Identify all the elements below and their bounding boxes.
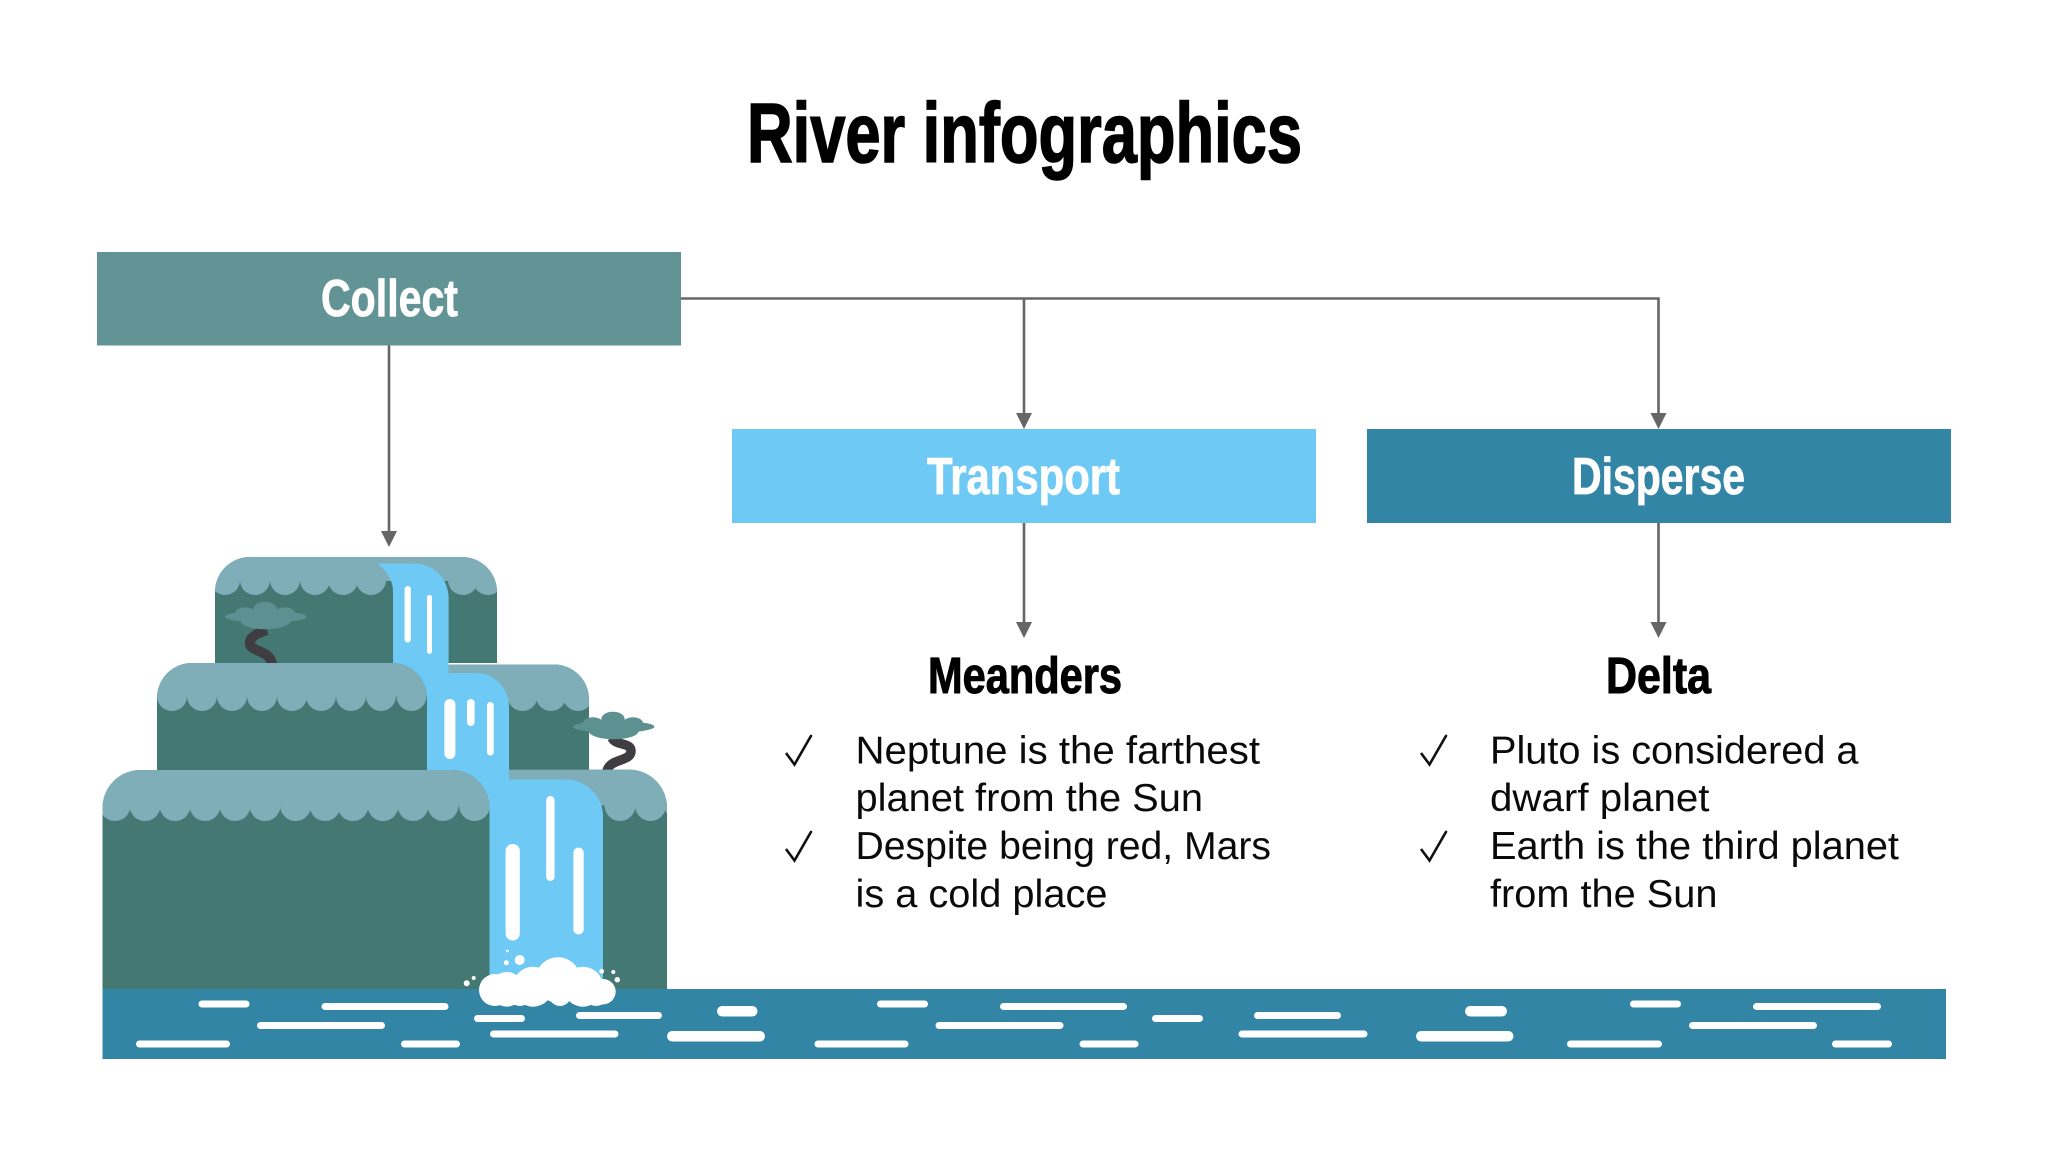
river ripples <box>136 1000 1892 1048</box>
heading: Delta: Delta <box>1606 647 1712 704</box>
text: Neptune: Neptune is the farthest <box>856 730 1260 772</box>
water streaks <box>405 586 584 940</box>
river <box>102 989 1946 1059</box>
title: River infographics <box>747 86 1302 180</box>
box: Transport <box>732 429 1316 523</box>
box: Transport: Transport <box>927 448 1120 506</box>
tree: right <box>573 712 654 771</box>
water: lower fall <box>490 780 603 990</box>
cliff: middle right tier <box>448 664 589 770</box>
text: Pluto: dwarf planet <box>1490 777 1710 820</box>
panel: Meanders <box>786 647 1271 916</box>
icon: check mark <box>1421 735 1446 764</box>
arrow: Collect to waterfall <box>381 345 397 547</box>
icon: check mark <box>1421 831 1446 860</box>
heading: Meanders: Meanders <box>928 647 1122 704</box>
cliff: bottom right tier <box>509 770 667 989</box>
text: Neptune: planet from the Sun <box>856 777 1203 820</box>
water: upper fall <box>377 564 449 705</box>
text: Pluto: Pluto is considered a <box>1490 730 1859 772</box>
tree: left <box>225 602 306 664</box>
icon: check mark <box>786 831 812 860</box>
cliff: bottom front tier <box>100 770 490 990</box>
text: Mars: is a cold place <box>856 873 1108 916</box>
icon: check mark <box>786 735 812 764</box>
text: Earth: from the Sun <box>1490 873 1718 916</box>
box: Collect <box>97 252 681 346</box>
cliff: top tier <box>210 557 503 663</box>
cliff: middle front tier <box>157 663 427 770</box>
arrow: Disperse to Delta <box>1650 523 1666 638</box>
arrow: Transport to Meanders <box>1016 523 1032 638</box>
text: Earth: Earth is the third planet <box>1490 825 1899 868</box>
box: Disperse: Disperse <box>1572 448 1745 506</box>
box: Collect: Collect <box>321 270 458 328</box>
text: Mars: Despite being red, Mars <box>856 825 1271 868</box>
panel: Delta <box>1421 647 1899 916</box>
box: Disperse <box>1367 429 1951 523</box>
water: middle fall <box>427 673 509 815</box>
connector: Collect to Transport and Disperse <box>681 298 1666 429</box>
foam splash <box>464 950 620 1007</box>
waterfall illustration <box>100 557 696 990</box>
